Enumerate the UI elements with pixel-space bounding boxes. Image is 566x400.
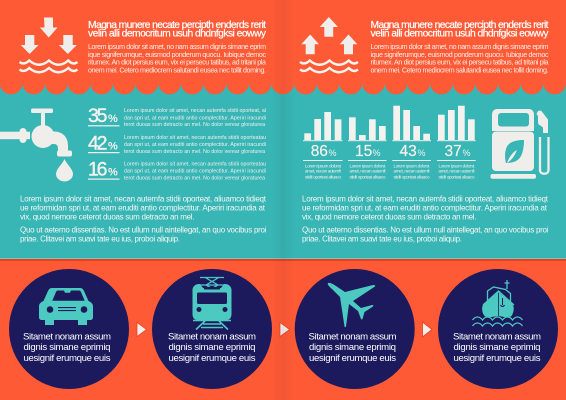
text block: left page intro: ique signiferumque, euismod ponderum quocu. Iubique democ	[88, 51, 266, 59]
stat row: 16%: terot duoas sum detracto an mel. No dolor verear gloraturea	[124, 176, 265, 182]
icon: eco fuel pump with leaf	[490, 109, 548, 179]
panel: ship circle	[438, 269, 558, 389]
bar chart: 86%	[303, 112, 342, 179]
caption	[453, 331, 541, 364]
bar chart: 43%: Lorem ipsum dolorst	[394, 163, 430, 168]
text block: left page lower copy: Lorem ipsum dolor sit amet, necan autemfa stidii oporteat, aliuamco tidieqt	[20, 195, 267, 204]
caption	[23, 331, 111, 364]
bar chart: 15%: stidii oporteat aliuaco	[350, 174, 386, 179]
icon: three arrows falling into water	[20, 18, 78, 72]
bar chart: 15%: amet, necan autemfi	[350, 169, 386, 174]
caption: uesignif erumque euis	[168, 353, 256, 364]
stat row: 35%: terot duoas sum detracto an mel. No dolor verear gloraturea	[124, 122, 265, 128]
caption	[168, 331, 256, 364]
heading: right page: velin alli democritum usuh dhdnfgksi eowwy	[370, 29, 549, 40]
icon: three arrows rising from water	[300, 17, 358, 72]
text block: right page lower copy: ue reformidan spri ut, at eam eruditi antio complectitur. Aperiri iracundia at	[302, 204, 548, 213]
heading: left page: velin alli democritum usuh dhdnfgksi eowwy	[88, 29, 267, 40]
stat row: 35%	[88, 105, 266, 128]
panel: orange top band with scalloped edge	[0, 0, 566, 94]
caption: Sitamet nonam assum	[453, 331, 541, 342]
bar chart: 37%: Lorem ipsum dolorst	[438, 163, 475, 168]
stat row: 16%: dan spri ut, at eam eruditi antio complectitur. Aperiri iracundi	[124, 169, 266, 175]
caption: dignis simane eprimiq	[454, 342, 540, 353]
text block: left page lower copy: vix, quod nemore ceterot duoas sum detracto an mel.	[20, 213, 194, 222]
heading: right page	[370, 20, 549, 40]
caption: Sitamet nonam assum	[23, 331, 111, 342]
bar chart: 86%: stidii oporteat aliuaco	[305, 174, 341, 179]
text block: right page intro: onem mei. Cetero mediocrem salutandi eusea nec tollit doming.	[370, 66, 549, 74]
arrow: step 1 to 2	[137, 322, 146, 336]
bar chart: 86%: amet, necan autemfi	[305, 169, 341, 174]
bar chart: 37%: amet, necan autemfi	[438, 169, 475, 174]
panel: orange bottom band	[0, 258, 566, 400]
heading: right page: Magna munere necate percipth enderds rerit	[370, 20, 549, 31]
icon: car	[39, 288, 93, 325]
caption: uesignif erumque euis	[24, 353, 111, 364]
text block: right page lower copy: Quo ut aeterno dissentias. No est ullum null aintellegat, an quo vocibus proi	[302, 226, 549, 235]
stat row: 35%: Lorem ipsum dolor sit amet, necan autemfa stidii oporteat, al	[124, 108, 266, 114]
text block: right page intro: Lorem ipsum dolor sit amet, no nam assum dignis simane eprim	[370, 43, 549, 51]
panel: car circle	[9, 269, 129, 389]
text block: right page intro: ique signiferumque, euismod ponderum quocu. Iubique democ	[370, 51, 549, 59]
bar chart: 15%: %	[372, 148, 381, 158]
text block: right page intro: ritumex. An diot persius eum, vix ei persecu tatibus, ad tritani pla	[370, 59, 549, 67]
text block: right page intro	[370, 43, 549, 74]
text block: left page intro: onem mei. Cetero mediocrem salutandi eusea nec tollit doming.	[88, 66, 266, 74]
stat row: 42%: %	[108, 140, 118, 152]
caption: dignis simane eprimiq	[309, 342, 396, 353]
caption: Sitamet nonam assum	[168, 331, 256, 342]
heading: left page	[88, 20, 267, 40]
bar chart: 43%: 43	[400, 143, 417, 160]
stat row: 35%: 35	[88, 105, 108, 127]
text block: left page intro: Lorem ipsum dolor sit amet, no nam assum dignis simane eprim	[88, 43, 266, 51]
stat row: 16%	[88, 159, 266, 182]
bar chart: 37%: stidii oporteat aliuaco	[438, 174, 475, 179]
icon: water tap with drop	[0, 108, 73, 181]
stat row: 16%: Lorem ipsum dolor sit amet, necan autemfa stidii oporteatau	[124, 161, 266, 167]
text block: left page lower copy: Quo ut aeterno dissentias. No est ullum null aintellegat, an quo vocibus proi	[20, 226, 267, 235]
icon: plane	[328, 283, 375, 327]
stat row: 42%: dan spri ut, at eam eruditi antio complectitur. Aperiri iracundi	[124, 142, 266, 148]
text block: right page lower copy	[302, 195, 549, 244]
bar chart: 15%	[348, 117, 386, 179]
stat row: 16%: %	[108, 167, 118, 179]
arrow: step 2 to 3	[280, 322, 290, 336]
stat row: 16%: 16	[88, 159, 108, 181]
bar chart: 86%: Lorem ipsum dolorst	[305, 163, 342, 168]
panel: teal middle background	[0, 0, 566, 260]
bar chart: 15%: Lorem ipsum dolorst	[350, 163, 386, 168]
caption: uesignif erumque euis	[454, 353, 541, 364]
bar chart: 15%: 15	[355, 143, 372, 160]
caption: uesignif erumque euis	[309, 353, 396, 364]
bar chart: 86%: %	[328, 148, 337, 158]
text block: left page lower copy	[20, 195, 267, 244]
bar chart: 37%: 37	[444, 143, 462, 160]
stat row: 42%	[88, 132, 266, 155]
text block: right page lower copy: vix, quod nemore ceterot duoas sum detracto an mel.	[302, 213, 476, 222]
text block: left page lower copy: ue reformidan spri ut, at eam eruditi antio complectitur. Aperiri iracundia at	[20, 204, 266, 213]
bar chart: 43%: amet, necan autemfi	[394, 169, 430, 174]
stat row: 35%: dan spri ut, at eam eruditi antio complectitur. Aperiri iracundi	[124, 115, 266, 121]
panel: plane circle	[295, 269, 415, 389]
stat row: 42%: 42	[88, 132, 108, 154]
text block: left page lower copy: priae. Clitavei am suavi tate eu ius, proboi aliquip.	[20, 235, 180, 244]
icon: train	[192, 278, 232, 330]
text block: left page intro: ritumex. An diot persius eum, vix ei persecu tatibus, ad tritani pla	[88, 59, 266, 67]
bar chart: 43%: %	[418, 148, 426, 158]
panel: train circle	[152, 269, 272, 389]
caption	[308, 331, 396, 364]
stat row: 42%: Lorem ipsum dolor sit amet, necan autemfa stidii oporteatau	[124, 135, 266, 141]
stat row: 42%: terot duoas sum detracto an mel. No dolor verear gloraturea	[124, 149, 265, 155]
bar chart: 86%: 86	[311, 143, 328, 160]
arrow: step 3 to 4	[422, 322, 432, 337]
stat row: 35%: %	[108, 113, 118, 125]
icon: ship	[472, 280, 522, 326]
text block: right page lower copy: Lorem ipsum dolor sit amet, necan autemfa stidii oporteat, aliuamco tidieqt	[302, 195, 549, 204]
text block: left page intro	[88, 43, 266, 74]
bar chart: 37%	[437, 106, 476, 179]
text block: right page lower copy: priae. Clitavei am suavi tate eu ius, proboi aliquip.	[302, 235, 462, 244]
bar chart: 43%	[392, 106, 431, 179]
bar chart: 37%: %	[462, 148, 471, 158]
caption: dignis simane eprimiq	[24, 342, 110, 353]
bar chart: 43%: stidii oporteat aliuaco	[394, 174, 430, 179]
heading: left page: Magna munere necate percipth enderds rerit	[88, 20, 266, 31]
caption: Sitamet nonam assum	[308, 331, 396, 342]
caption: dignis simane eprimiq	[168, 342, 256, 353]
